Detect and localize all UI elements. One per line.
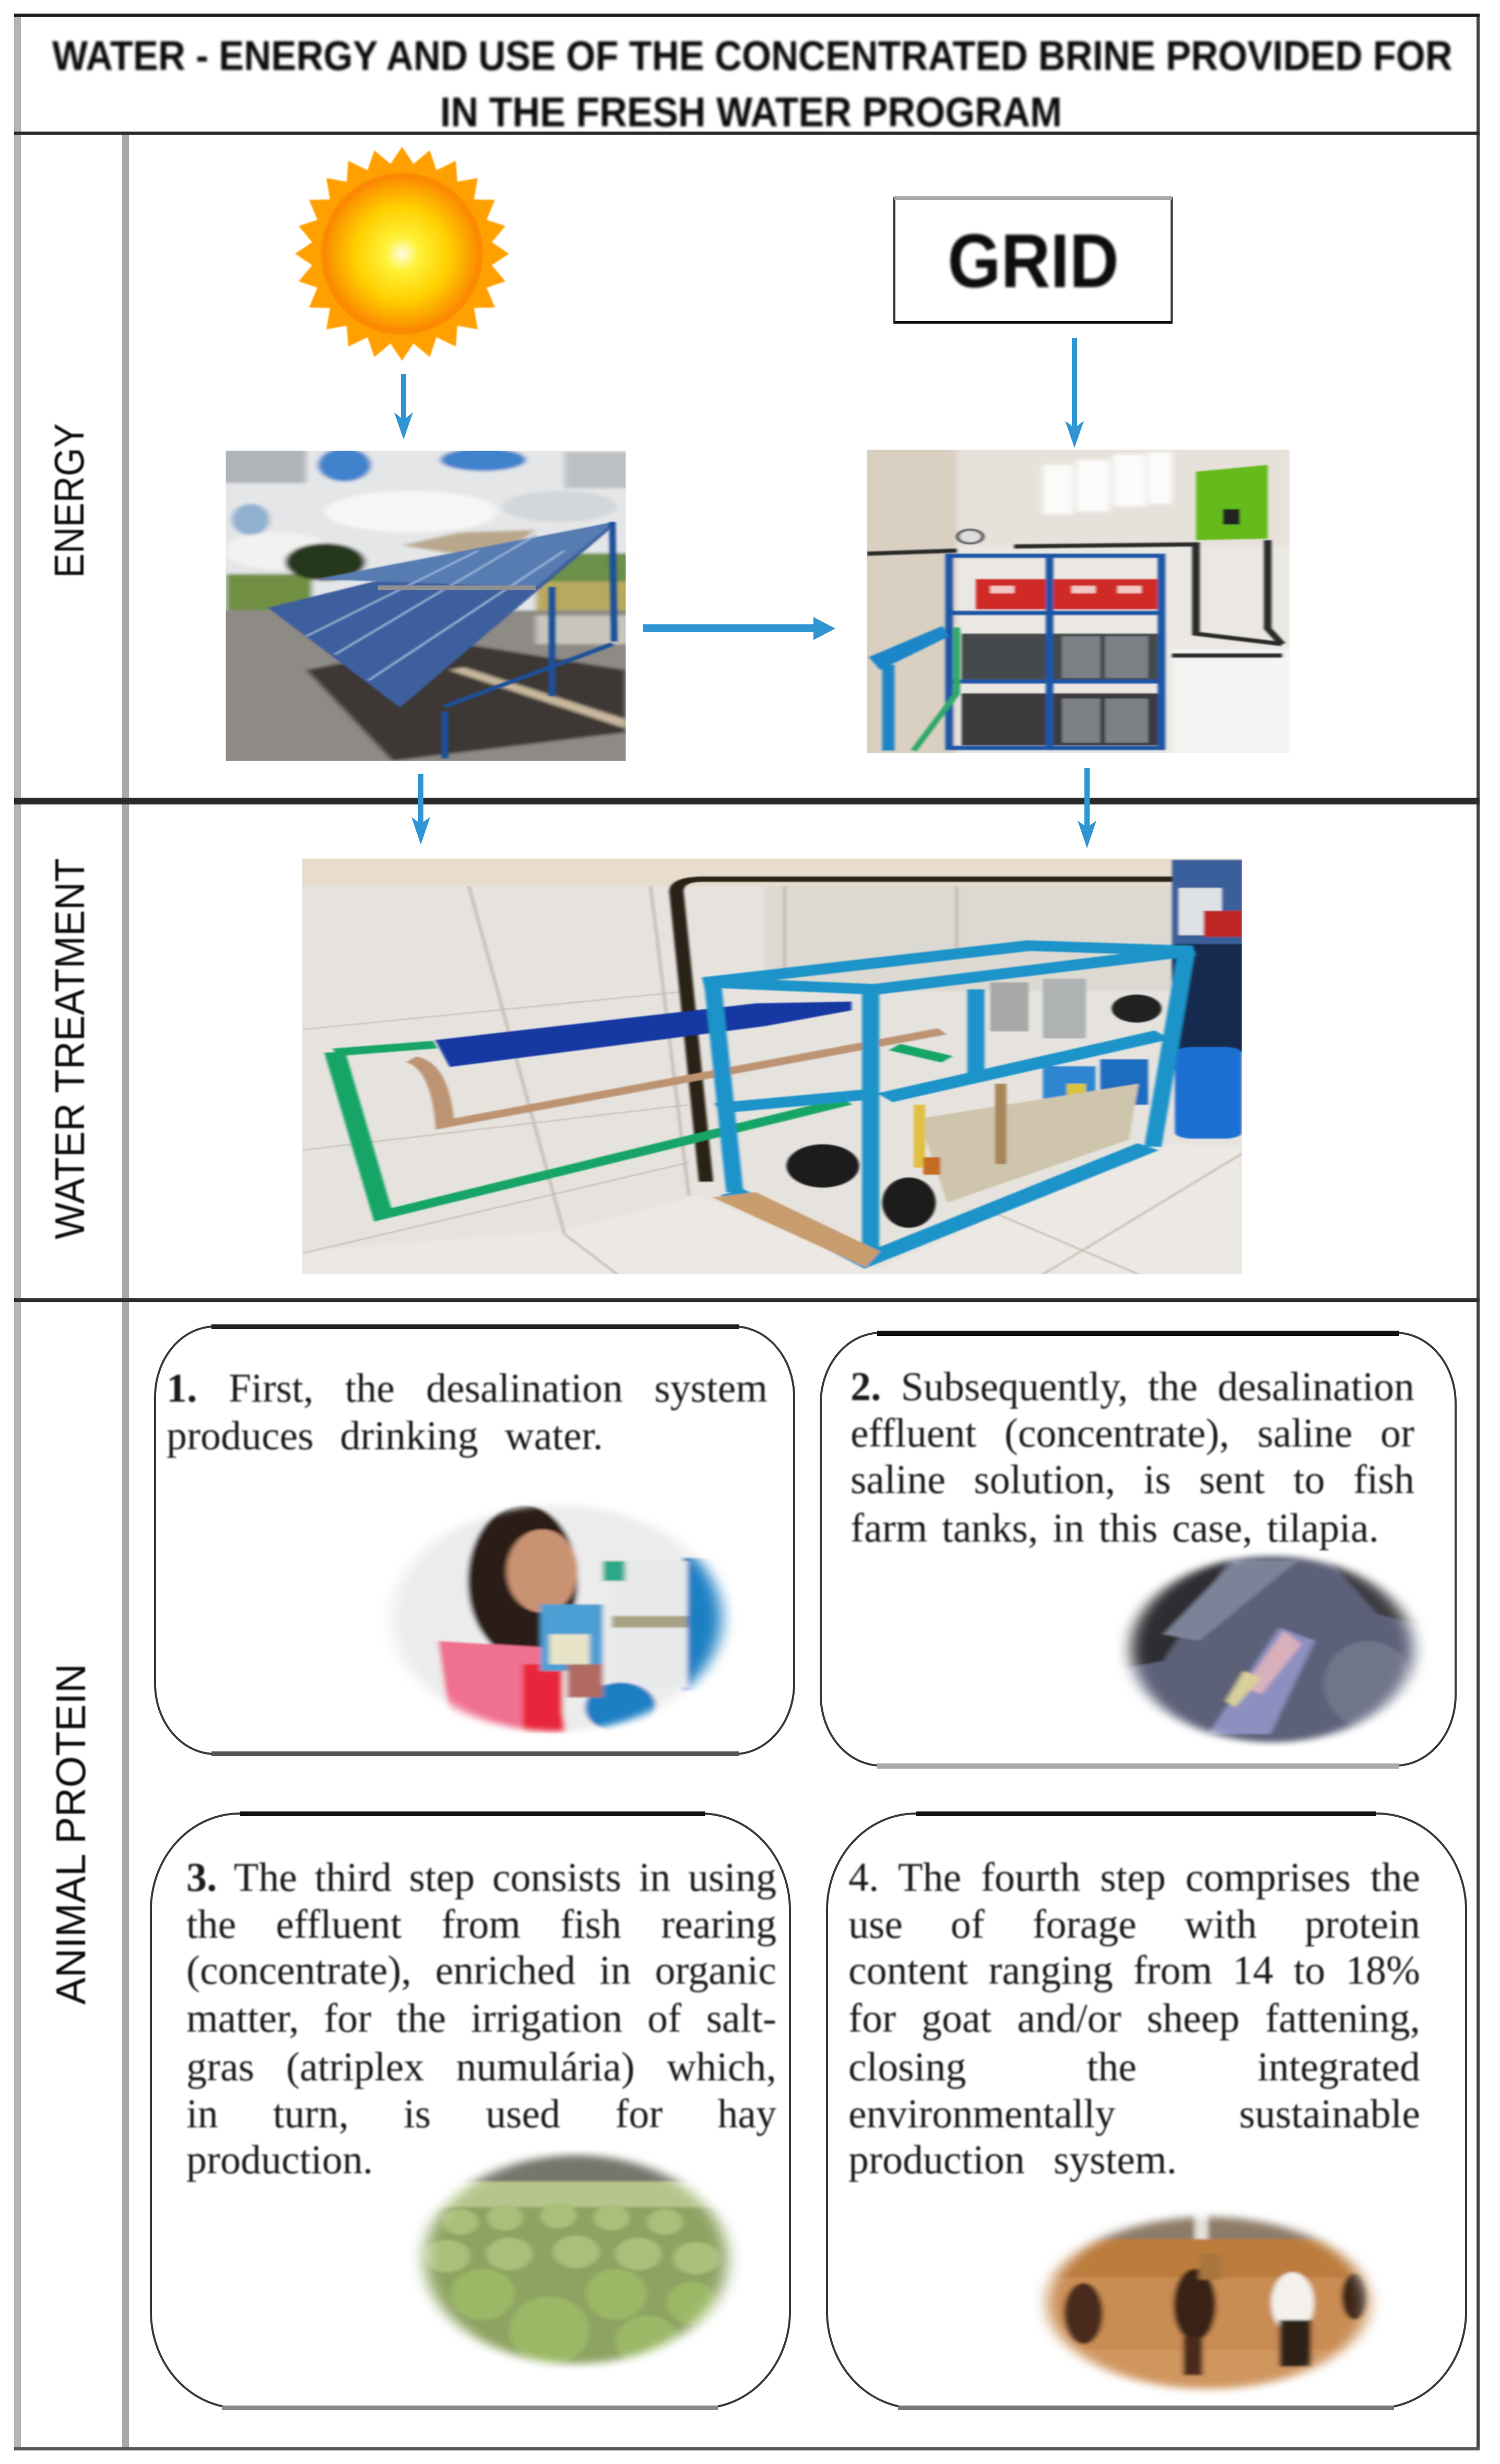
card 3 text: gras (atriplex numulária) which, (186, 2044, 776, 2089)
photo: saltgrass field (407, 2150, 745, 2371)
arrow: solar panels to batteries (643, 617, 835, 640)
arrow: grid to batteries (1065, 338, 1084, 448)
photo: goats (1030, 2209, 1386, 2397)
grid box: GRID (948, 218, 1119, 303)
card 1: drinking water (154, 1324, 795, 1756)
card 2 text (851, 1364, 1415, 1551)
card 2 text: 2. Subsequently, the desalination (851, 1364, 1414, 1409)
card 3 text: the effluent from fish rearing (186, 1901, 776, 1947)
photo: batteries and inverter (861, 447, 1292, 756)
photo: desalination unit (297, 857, 1248, 1276)
card 3: saltgrass irrigation (150, 1811, 791, 2410)
card 4 text: production system. (848, 2137, 1177, 2182)
section label: animal protein: ANIMAL PROTEIN (48, 1664, 94, 2005)
title (52, 32, 1452, 135)
card 1 text (166, 1365, 768, 1460)
title: IN THE FRESH WATER PROGRAM (440, 89, 1062, 135)
arrow: batteries to water treatment (1078, 768, 1096, 848)
card 4: goat and sheep fattening (826, 1811, 1467, 2410)
card 2 text: saline solution, is sent to fish (851, 1456, 1414, 1502)
section label: energy: ENERGY (46, 423, 92, 578)
card 4 text: for goat and/or sheep fattening, (848, 1995, 1420, 2041)
card 4 text: use of forage with protein (848, 1901, 1420, 1947)
photo: solar panels (220, 447, 631, 764)
card 4 text: closing the integrated (848, 2044, 1420, 2089)
card 2 text: farm tanks, in this case, tilapia. (851, 1505, 1379, 1550)
card 3 text: matter, for the irrigation of salt- (186, 1995, 776, 2041)
icon: sun (295, 147, 509, 361)
card 3 text: in turn, is used for hay (186, 2091, 776, 2136)
grid box (894, 196, 1172, 324)
photo: tilapia (1110, 1551, 1431, 1747)
card 2: fish farm tanks (820, 1331, 1457, 1769)
card 4 text: environmentally sustainable (848, 2091, 1420, 2136)
arrow: sun to solar panels (394, 374, 413, 440)
section label: water treatment: WATER TREATMENT (46, 858, 93, 1239)
arrow: solar panels to water treatment (411, 774, 430, 845)
card 3 text: (concentrate), enriched in organic (186, 1947, 776, 1993)
card 1 text: 1. First, the desalination system (167, 1365, 767, 1411)
photo: girl with water (391, 1504, 734, 1734)
card 3 text: production. (186, 2137, 373, 2182)
card 3 text: 3. The third step consists in using (186, 1854, 776, 1900)
card 2 text: effluent (concentrate), saline or (851, 1410, 1414, 1455)
card 3 text (186, 1854, 777, 2183)
card 4 text (848, 1854, 1421, 2183)
card 4 text: content ranging from 14 to 18% (848, 1947, 1420, 1993)
card 4 text: 4. The fourth step comprises the (848, 1854, 1420, 1900)
card 1 text: produces drinking water. (167, 1413, 603, 1458)
